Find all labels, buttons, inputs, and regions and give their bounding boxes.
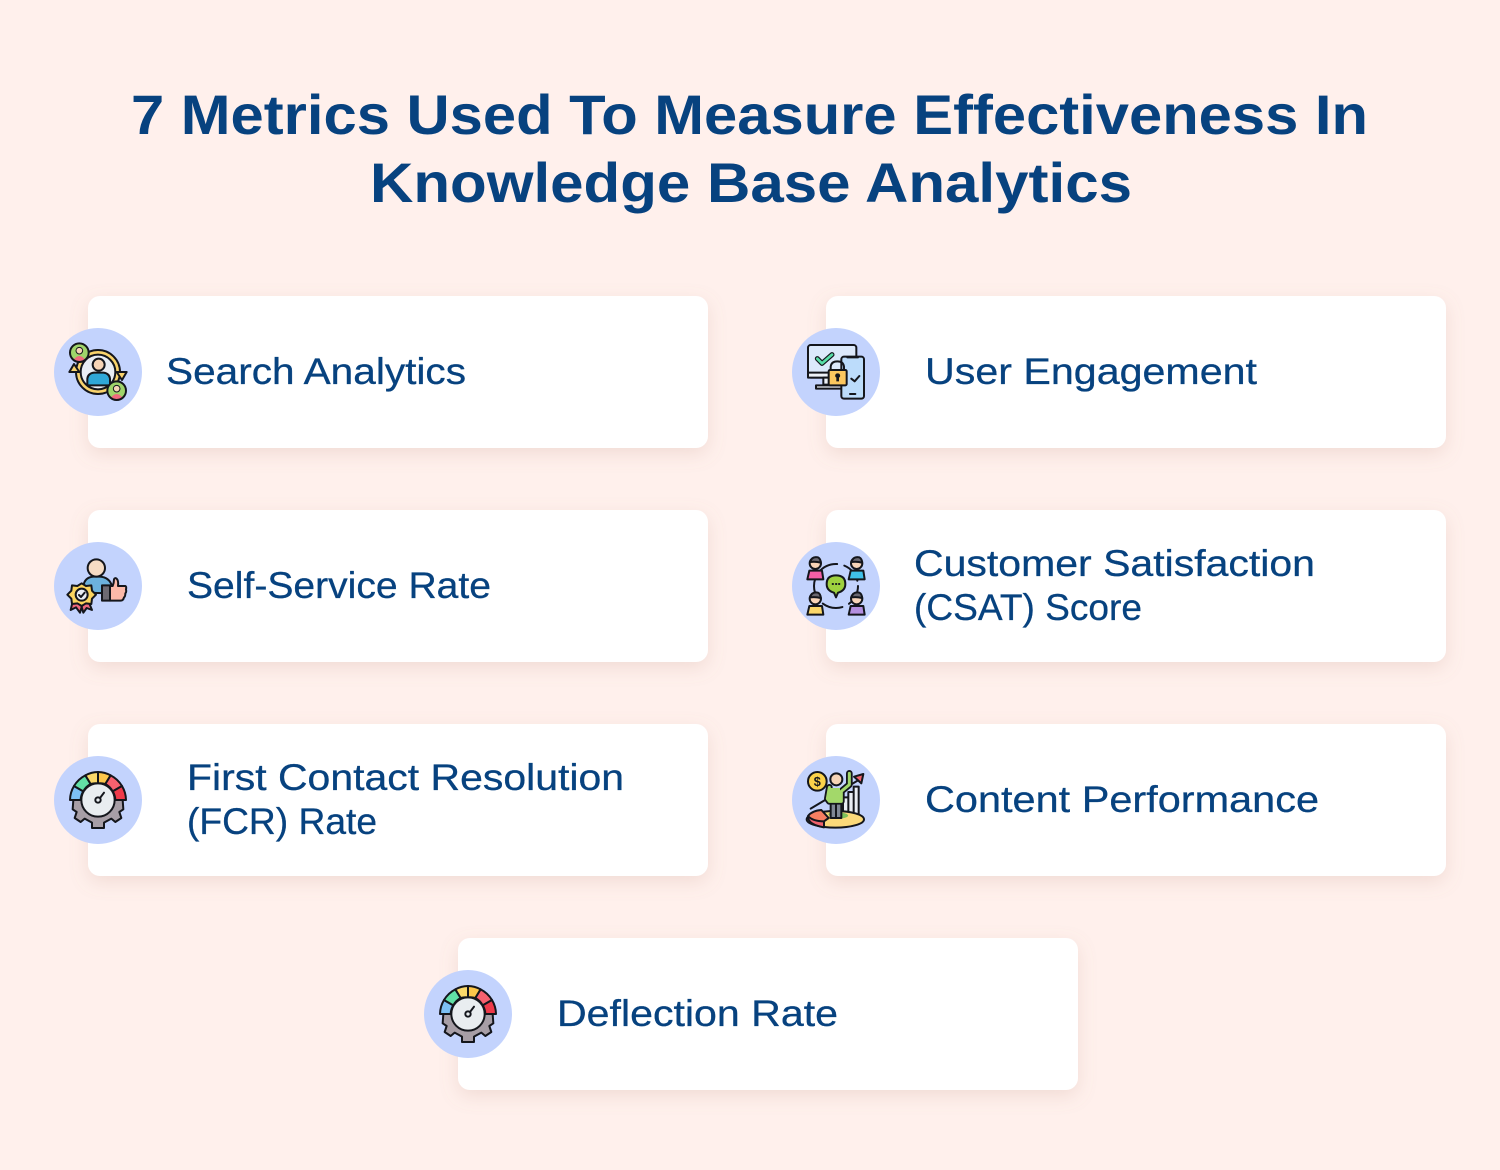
icon: first contact resolution	[54, 756, 142, 844]
panel: search analytics	[54, 296, 708, 448]
icon: content performance: $	[814, 775, 821, 789]
title: Knowledge Base Analytics	[370, 151, 1132, 214]
label: customer satisfaction	[914, 543, 1315, 628]
label: search analytics: Search Analytics	[166, 351, 466, 392]
label: deflection rate: Deflection Rate	[557, 993, 838, 1034]
label: customer satisfaction: (CSAT) Score	[914, 587, 1142, 628]
icon: content performance	[792, 756, 880, 844]
label: customer satisfaction: Customer Satisfaction	[914, 543, 1315, 584]
icon: customer satisfaction	[792, 542, 880, 630]
title: 7 Metrics Used To Measure Effectiveness In	[131, 83, 1368, 146]
icon: user engagement	[792, 328, 880, 416]
panel: deflection rate	[424, 938, 1078, 1090]
panel: first contact resolution	[54, 724, 708, 876]
panel: self-service rate	[54, 510, 708, 662]
icon: self-service rate	[54, 542, 142, 630]
label: user engagement: User Engagement	[925, 351, 1258, 392]
label: first contact resolution	[187, 757, 624, 842]
icon: search analytics	[54, 328, 142, 416]
icon: deflection rate	[424, 970, 512, 1058]
label: first contact resolution: First Contact Resolution	[187, 757, 624, 798]
label: first contact resolution: (FCR) Rate	[187, 801, 377, 842]
label: content performance: Content Performance	[925, 779, 1319, 820]
panel: customer satisfaction	[792, 510, 1446, 662]
panel: content performance	[792, 724, 1446, 876]
title	[131, 83, 1368, 214]
label: self-service rate: Self-Service Rate	[187, 565, 491, 606]
panel: user engagement	[792, 296, 1446, 448]
